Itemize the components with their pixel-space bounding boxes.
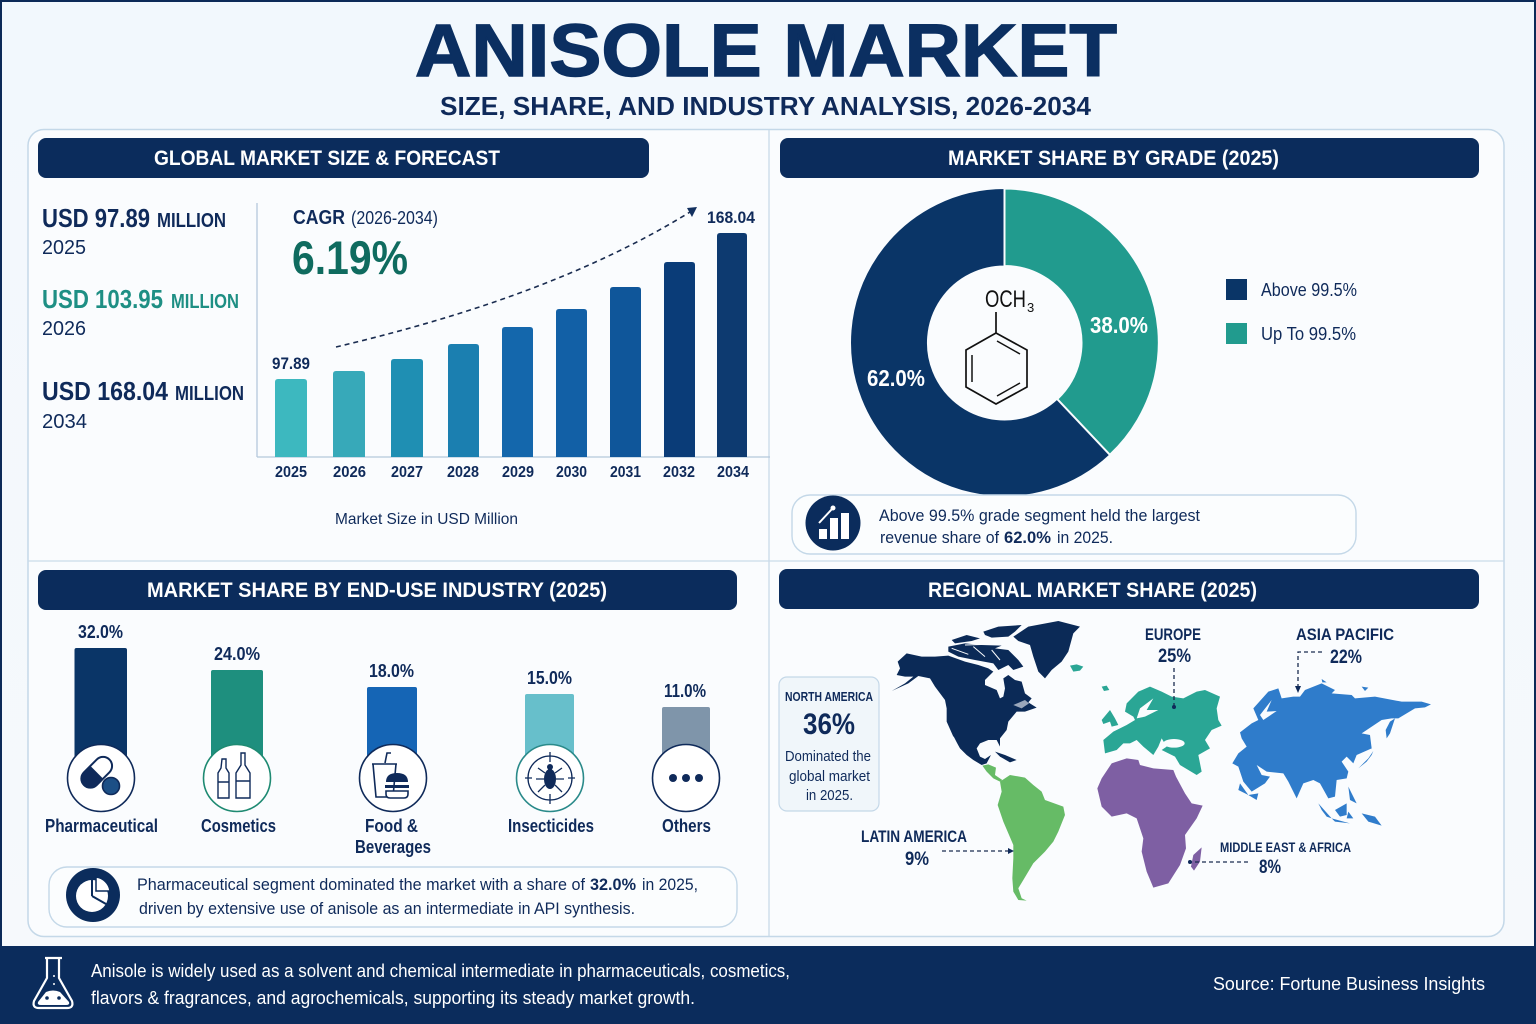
callout: North America <box>779 677 879 811</box>
subtitle: SIZE, SHARE, AND INDUSTRY ANALYSIS, 2026-2034 <box>440 91 1092 121</box>
icon: bar chart badge <box>806 496 860 550</box>
legend: Up To 99.5% <box>1261 324 1356 344</box>
footer band <box>0 946 1536 1024</box>
CAGR callout: CAGR <box>293 207 345 229</box>
icon: pills <box>68 744 134 812</box>
bar: insecticides: 15.0% <box>527 668 572 688</box>
icon: insect in crosshair <box>516 744 584 812</box>
callout: grade insight: Above 99.5% grade segment held the largest <box>879 506 1200 525</box>
stat: 2026 market size: MILLION <box>171 291 239 313</box>
bar: cosmetics: Cosmetics <box>201 816 276 836</box>
bar chart: market size by year: 2027 <box>391 464 423 481</box>
map: North America <box>892 621 1080 765</box>
bar: others <box>652 681 720 836</box>
bar chart: market size by year: 97.89 <box>272 354 310 373</box>
panel: market share by end-use industry <box>38 570 737 927</box>
icon: anisole molecule <box>966 286 1034 404</box>
heading: regional market share <box>779 569 1479 609</box>
label: Asia Pacific <box>1295 625 1394 693</box>
bar chart: market size by year: 2034 <box>717 464 749 481</box>
callout: industry insight: 32.0% <box>590 875 636 894</box>
stat: 2034 market size: MILLION <box>175 383 244 405</box>
label: Middle East and Africa: MIDDLE EAST & AFRICA <box>1220 839 1351 855</box>
callout: North America: NORTH AMERICA <box>785 689 873 704</box>
heading: global market size <box>38 138 649 178</box>
source: Source: Fortune Business Insights <box>1213 974 1485 994</box>
stat: 2025 market size: MILLION <box>157 210 226 232</box>
bar chart: market size by year <box>257 203 770 481</box>
label: Europe: EUROPE <box>1145 625 1201 644</box>
bar: others: 11.0% <box>664 681 706 701</box>
main panel frame <box>28 130 1504 936</box>
stat: 2025 market size: 2025 <box>42 237 86 259</box>
stat: 2034 market size: USD 168.04 <box>42 376 168 406</box>
axis caption: Market Size in USD Million <box>335 511 518 528</box>
bar: insecticides <box>508 668 594 836</box>
icon: pie chart badge <box>66 868 120 922</box>
stat: 2026 market size: USD 103.95 <box>42 284 163 314</box>
map: Iceland <box>1070 664 1083 672</box>
bar: food and beverages: 18.0% <box>369 661 414 681</box>
stat: 2034 market size <box>42 376 244 433</box>
map: Asia Pacific <box>1232 679 1431 826</box>
callout: industry insight: Pharmaceutical segment dominated the market with a share of <box>137 875 585 894</box>
legend <box>1226 279 1357 344</box>
callout: industry insight <box>49 867 737 927</box>
bar: food and beverages: Food & <box>365 816 418 836</box>
callout: grade insight: revenue share of <box>880 528 999 547</box>
heading: end-use industry: MARKET SHARE BY END-USE INDUSTRY (2025) <box>147 579 607 602</box>
bar chart: market size by year: 2025 <box>275 464 307 481</box>
callout: North America: Dominated the <box>785 748 871 765</box>
footer note: Anisole is widely used as a solvent and chemical intermediate in pharmaceuticals, cosmetics, <box>91 961 790 981</box>
label: Middle East and Africa <box>1188 839 1351 878</box>
map: Europe <box>1102 686 1222 775</box>
bar chart: market size by year: 2026 <box>333 464 366 481</box>
callout: North America: 36% <box>803 708 855 741</box>
label: Asia Pacific: ASIA PACIFIC <box>1296 625 1394 644</box>
bar chart: market size by year: 2030 <box>556 464 587 481</box>
callout: North America: global market <box>789 768 871 785</box>
heading: market share by grade <box>780 138 1479 178</box>
callout: grade insight: in 2025. <box>1057 528 1113 547</box>
icon: anisole molecule: OCH <box>985 286 1026 313</box>
label: Latin America <box>861 827 1014 870</box>
icon: cosmetic bottles <box>204 744 270 812</box>
bar chart: market size by year: 2029 <box>502 464 534 481</box>
map: Africa <box>1097 758 1203 888</box>
label: Europe: 25% <box>1158 646 1191 667</box>
heading: market share by grade: MARKET SHARE BY GRADE (2025) <box>948 147 1279 170</box>
donut chart: 62.0% <box>867 365 925 391</box>
label: Latin America: LATIN AMERICA <box>861 827 967 846</box>
icon: anisole molecule: 3 <box>1027 300 1034 315</box>
heading: regional market share: REGIONAL MARKET SHARE (2025) <box>928 579 1257 602</box>
bar chart: market size by year: 2031 <box>610 464 641 481</box>
stat: 2026 market size: 2026 <box>42 318 86 340</box>
title: ANISOLE MARKET <box>415 9 1117 92</box>
heading: global market size: GLOBAL MARKET SIZE & FORECAST <box>154 147 500 170</box>
CAGR callout: 6.19% <box>292 231 408 284</box>
callout: grade insight: 62.0% <box>1004 528 1051 547</box>
legend: Above 99.5% <box>1261 280 1357 300</box>
bar: others: Others <box>662 816 711 836</box>
CAGR callout <box>292 207 438 284</box>
panel: regional market share <box>779 569 1479 901</box>
bar: insecticides: Insecticides <box>508 816 594 836</box>
bar chart: market size by year: 2028 <box>447 464 479 481</box>
bar: pharmaceutical: Pharmaceutical <box>45 816 158 836</box>
footer note: flavors & fragrances, and agrochemicals, supporting its steady market growth. <box>91 988 695 1008</box>
callout: industry insight: driven by extensive use of anisole as an intermediate in API synthesis. <box>139 899 635 918</box>
label: Asia Pacific: 22% <box>1330 647 1362 668</box>
bar chart: market size by year: 168.04 <box>707 208 755 227</box>
callout: industry insight: in 2025, <box>642 875 698 894</box>
stat: 2026 market size <box>42 284 239 340</box>
donut chart <box>851 188 1159 497</box>
bar: cosmetics <box>201 644 276 836</box>
stat: 2025 market size: USD 97.89 <box>42 203 150 233</box>
world map <box>892 621 1431 901</box>
footer note <box>91 961 790 1008</box>
stat: 2034 market size: 2034 <box>42 411 87 433</box>
arrow: growth trend <box>336 207 697 347</box>
icon: flask <box>34 958 72 1008</box>
label: Europe <box>1145 625 1201 709</box>
bar: pharmaceutical: 32.0% <box>78 622 123 642</box>
label: Latin America: 9% <box>905 849 929 870</box>
callout: grade insight <box>792 495 1356 554</box>
map: Latin America <box>982 764 1065 901</box>
icon: drink and burger <box>360 744 426 812</box>
label: Middle East and Africa: 8% <box>1259 857 1281 878</box>
icon: three dots <box>652 744 720 812</box>
bar chart: market size by year: 2032 <box>663 464 695 481</box>
stat: 2025 market size <box>42 203 226 259</box>
bar: pharmaceutical <box>45 622 158 836</box>
bar: food and beverages: Beverages <box>355 837 431 857</box>
CAGR callout: (2026-2034) <box>351 208 438 228</box>
bar: food and beverages <box>355 661 431 857</box>
donut chart: 38.0% <box>1090 312 1148 338</box>
panel: global market size and forecast <box>38 138 770 528</box>
bar: cosmetics: 24.0% <box>214 644 260 664</box>
panel: market share by grade <box>780 138 1479 554</box>
heading: end-use industry <box>38 570 737 610</box>
callout: North America: in 2025. <box>806 787 853 804</box>
